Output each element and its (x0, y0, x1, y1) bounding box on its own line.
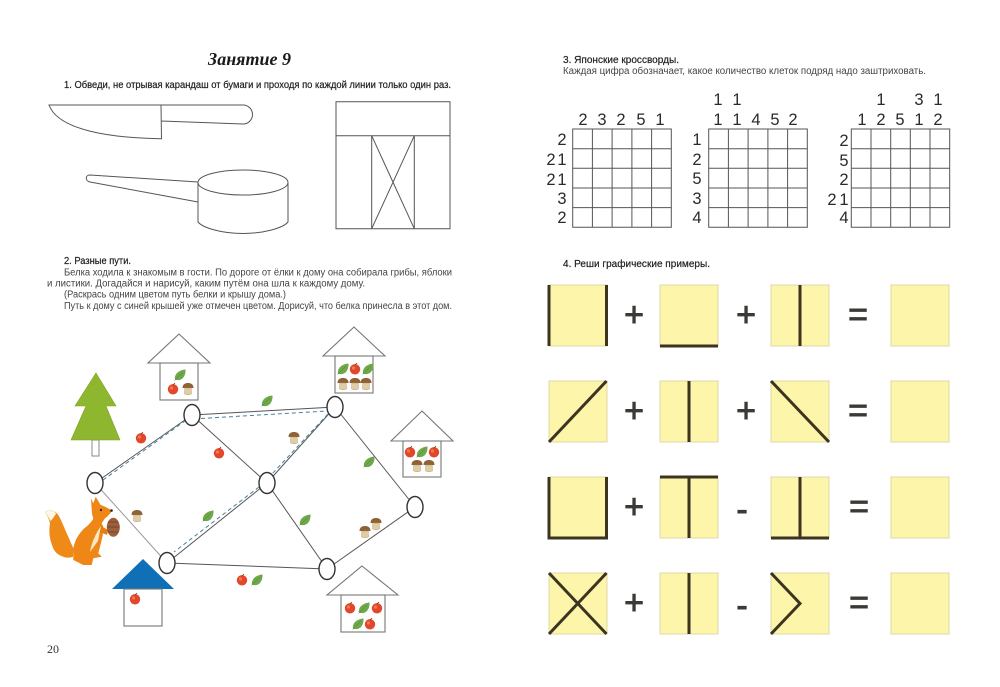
crossword 3: 1 (876, 91, 886, 109)
equation row 3 (549, 477, 949, 538)
crossword 2: 3 (692, 190, 702, 208)
equation row 2: + (736, 392, 756, 430)
equation row 3: + (624, 488, 644, 526)
crossword 2: 4 (751, 111, 761, 129)
path items: apples, leaves and mushrooms (132, 396, 382, 586)
house: top right (323, 327, 385, 393)
crossword 2 (692, 91, 807, 227)
page number: 20 (47, 642, 59, 656)
crossword 3: 5 (839, 152, 849, 170)
crossword 2: 4 (692, 209, 702, 227)
crossword 2: 5 (770, 111, 780, 129)
icon: fir tree (71, 373, 120, 456)
panel: task 1 tracing (49, 79, 451, 234)
crossword 3: 3 (914, 91, 924, 109)
task 2 line 3: (Раскрась одним цветом путь белки и крышу дома.) (64, 289, 286, 301)
equation row 4: + (624, 584, 644, 622)
crossword 2: 1 (713, 111, 723, 129)
crossword 3: 1 (933, 91, 943, 109)
crossword 2: 1 (732, 91, 742, 109)
equation row 1: = (848, 296, 868, 334)
edge: light line from fir to blue house (95, 483, 167, 563)
crossword 3: 2 (839, 132, 849, 150)
equation row 4: = (849, 584, 869, 622)
task 1 heading: 1. Обведи, не отрывая карандаш от бумаги и проходя по каждой линии только один раз. (64, 79, 451, 91)
crossword 3: 2 (827, 191, 837, 209)
crossword 1 (546, 111, 671, 227)
house: blue roof (112, 559, 174, 626)
crossword 1: 2 (616, 111, 626, 129)
crossword 2: 2 (788, 111, 798, 129)
crossword 3: 1 (857, 111, 867, 129)
equation row 2: + (624, 392, 644, 430)
crossword 3: 2 (876, 111, 886, 129)
crossword 3: 4 (839, 209, 849, 227)
crossword 2: 1 (713, 91, 723, 109)
panel: task 3 crosswords (546, 55, 950, 227)
crossword 1: 2 (557, 131, 567, 149)
crossword 3: 2 (839, 171, 849, 189)
equation row 3: = (849, 488, 869, 526)
title: Занятие 9 (207, 49, 291, 69)
task 2 heading: 2. Разные пути. (64, 256, 131, 267)
crossword 1: 5 (636, 111, 646, 129)
equation row 1: + (736, 296, 756, 334)
house: top left (148, 334, 210, 400)
crossword 2: 1 (692, 131, 702, 149)
crossword 1: 2 (578, 111, 588, 129)
crossword 3: 1 (914, 111, 924, 129)
crossword 1: 3 (597, 111, 607, 129)
crossword 3: 1 (839, 191, 849, 209)
panel: task 2 text (47, 256, 452, 312)
task 4 heading: 4. Реши графические примеры. (563, 258, 710, 270)
task 3 heading: 3. Японские кроссворды. (563, 55, 679, 66)
figure: saucepan (86, 170, 288, 234)
equation row 1: + (624, 296, 644, 334)
panel: path map (45, 327, 453, 632)
house: bottom right (327, 566, 398, 632)
equation row 2: = (848, 392, 868, 430)
task 2 line 2: и листики. Догадайся и нарисуй, каким путём она шла к каждому дому. (47, 279, 365, 290)
crossword 2: 1 (732, 111, 742, 129)
task 2 line 1: Белка ходила к знакомым в гости. По дороге от ёлки к дому она собирала грибы, яблоки (64, 267, 452, 279)
crossword 1: 1 (557, 151, 567, 169)
crossword 2: 2 (692, 151, 702, 169)
crossword 1: 2 (546, 171, 556, 189)
crossword 1: 1 (557, 171, 567, 189)
equation row 3: - (736, 491, 748, 529)
crossword 1: 2 (557, 209, 567, 227)
blue dashed route (103, 411, 328, 552)
icon: squirrel with pine cone (45, 497, 120, 565)
equation row 4: - (736, 587, 748, 625)
map edges (95, 407, 415, 569)
panel: task 4 graphic sums (549, 258, 949, 634)
crossword 1: 2 (546, 151, 556, 169)
house: right (391, 411, 453, 477)
equation row 4 (549, 573, 949, 634)
task 3 description: Каждая цифра обозначает, какое количество клеток подряд надо заштриховать. (563, 65, 926, 77)
crossword 3 (827, 91, 950, 227)
crossword 2: 5 (692, 170, 702, 188)
figure: rectangle with cross (336, 102, 450, 229)
map nodes (87, 396, 423, 580)
crossword 3: 5 (895, 111, 905, 129)
figure: knife (49, 105, 252, 139)
equation row 1 (549, 285, 949, 346)
task 2 line 4: Путь к дому с синей крышей уже отмечен цветом. Дорисуй, что белка принесла в этот дом. (64, 300, 452, 312)
crossword 1: 1 (655, 111, 665, 129)
equation row 2 (549, 381, 949, 442)
crossword 1: 3 (557, 190, 567, 208)
crossword 3: 2 (933, 111, 943, 129)
